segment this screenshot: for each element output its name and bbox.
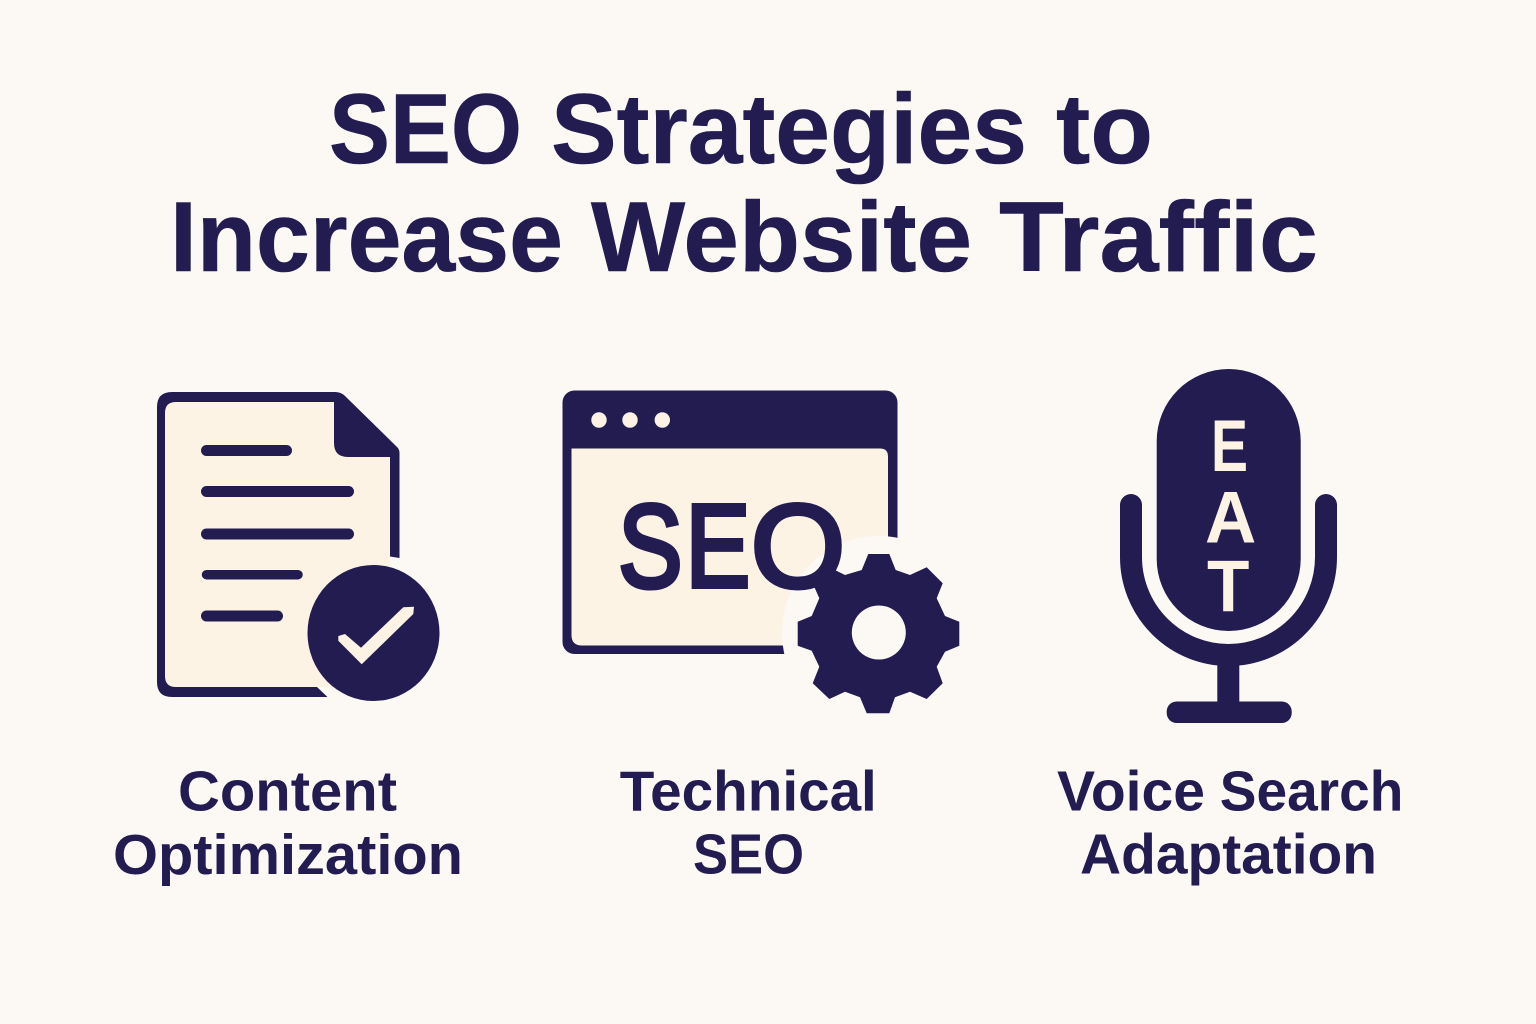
icon: microphone with EAT: T (1207, 546, 1249, 627)
icon: browser window with gear: O (751, 481, 845, 613)
title: SEO (329, 73, 522, 184)
label: Technical SEO: SEO (693, 822, 804, 886)
title: to (1056, 73, 1153, 184)
icon: browser window with gear (562, 390, 976, 730)
icon: microphone with EAT: E (1211, 406, 1248, 487)
icon: microphone with EAT (1131, 369, 1326, 723)
icon: browser window with gear: E (686, 480, 750, 612)
label: Content Optimization: Content (178, 760, 397, 824)
title: Website (591, 181, 972, 292)
label: Technical SEO (620, 760, 877, 886)
icon: microphone with EAT: A (1205, 478, 1256, 558)
title: Increase (170, 181, 563, 292)
label: Voice Search Adaptation: Voice (1057, 760, 1205, 824)
label: Content Optimization (113, 760, 463, 887)
label: Content Optimization: Optimization (113, 823, 463, 887)
label: Voice Search Adaptation (1057, 760, 1403, 886)
title (170, 73, 1318, 292)
icon: gear (798, 554, 959, 713)
label: Voice Search Adaptation: Adaptation (1080, 822, 1377, 886)
icon: browser window with gear: S (618, 481, 682, 613)
label: Voice Search Adaptation: Search (1220, 760, 1403, 824)
icon: document with check (157, 392, 440, 701)
title: Traffic (999, 181, 1318, 292)
label: Technical SEO: Technical (620, 760, 877, 824)
title: Strategies (551, 73, 1027, 184)
